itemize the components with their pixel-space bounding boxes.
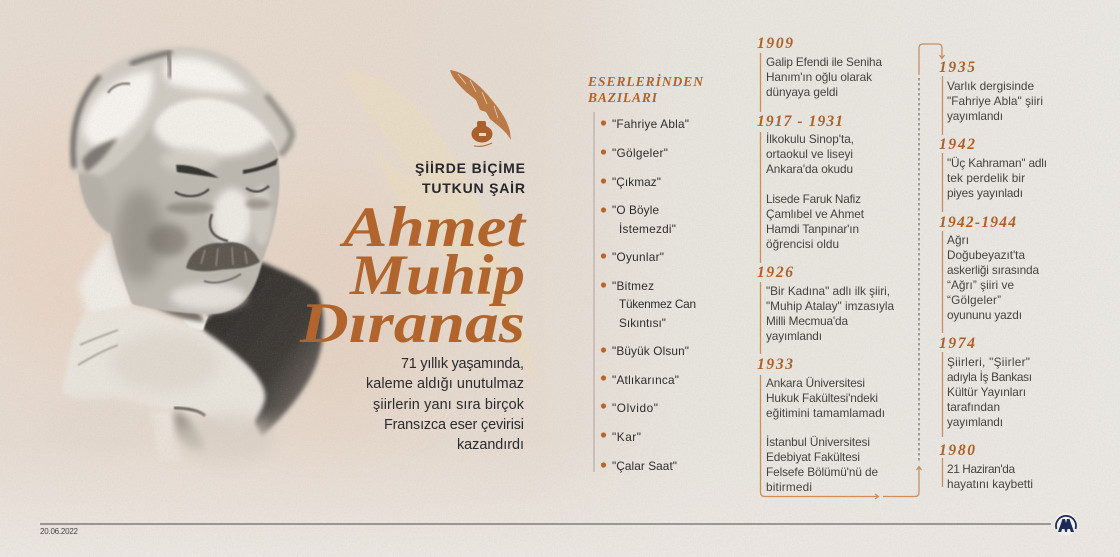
title: poet name: Ahmet <box>339 196 528 259</box>
entry: 1917-1931: Hamdi Tanpınar'ın <box>766 222 859 236</box>
text block: summary: şiirlerin yanı sıra birçok <box>373 397 525 413</box>
jacket <box>200 262 324 436</box>
works list: "Çıkmaz" <box>612 175 661 189</box>
shirt collar <box>78 234 134 316</box>
title: poet name: Muhip <box>349 244 525 307</box>
entry: 1942: tek perdelik bir <box>947 171 1025 185</box>
head and face <box>78 93 280 314</box>
panel: timeline column one <box>757 35 894 494</box>
entry: 1917-1931: Ankara'da okudu <box>766 162 853 176</box>
works list: "Oyunlar" <box>612 250 664 264</box>
entry: 1935 <box>939 59 1043 135</box>
entry: 1926: "Muhip Atalay" imzasıyla <box>766 299 894 313</box>
entry: 1942: "Üç Kahraman" adlı <box>947 156 1047 170</box>
icon: quill and inkpot <box>450 70 511 146</box>
text block: summary: Fransızca eser çevirisi <box>384 417 524 433</box>
icon: agency logo <box>1054 512 1078 536</box>
date: 20.06.2022 <box>40 527 79 536</box>
entry: 1933: Ankara Üniversitesi <box>766 376 865 390</box>
heading: selected works: ESERLERİNDEN <box>587 74 704 89</box>
entry: 1909: Galip Efendi ile Seniha <box>766 55 882 69</box>
entry: 1974: Kültür Yayınları <box>947 385 1026 399</box>
portrait photograph <box>50 47 324 466</box>
panel: timeline column two <box>939 59 1047 491</box>
entry: 1935: yayımlandı <box>947 109 1003 123</box>
entry: 1974: 1974 <box>939 335 975 352</box>
entry: 1942-1944 <box>939 214 1039 333</box>
entry: 1974: adıyla İş Bankası <box>947 370 1032 384</box>
entry: 1917-1931: Lisede Faruk Nafiz <box>766 192 861 206</box>
footer <box>40 512 1078 536</box>
hand <box>62 308 265 437</box>
entry: 1974 <box>939 335 1032 437</box>
title: poet name <box>299 196 528 355</box>
entry: 1933: Felsefe Bölümü'nü de <box>766 465 878 479</box>
entry: 1933 <box>757 356 885 494</box>
entry: 1933: 1933 <box>757 356 793 373</box>
eyes and brows <box>176 165 219 178</box>
works list: "Fahriye Abla" <box>612 117 689 131</box>
neck shadow <box>156 309 206 325</box>
entry: 1933: Hukuk Fakültesi'ndeki <box>766 391 878 405</box>
entry: 1909 <box>757 35 882 112</box>
entry: 1974: tarafından <box>947 400 1000 414</box>
entry: 1933: İstanbul Üniversitesi <box>766 435 870 449</box>
works list: Tükenmez Can <box>619 297 696 311</box>
entry: 1926: 1926 <box>757 264 793 281</box>
entry: 1935: 1935 <box>939 59 975 76</box>
entry: 1917-1931: İlkokulu Sinop'ta, <box>766 132 854 146</box>
entry: 1942-1944: oyununu yazdı <box>947 308 1022 322</box>
ear <box>80 184 110 234</box>
text block: summary <box>366 356 525 453</box>
entry: 1942-1944: “Ağrı” şiiri ve <box>947 278 1014 292</box>
works list: "Kar" <box>612 430 641 444</box>
entry: 1909: 1909 <box>757 35 793 52</box>
heading: subtitle <box>415 160 525 196</box>
entry: 1917-1931: ortaokul ve liseyi <box>766 147 853 161</box>
works list: "Atlıkarınca" <box>612 373 679 387</box>
panel: selected works <box>587 74 704 473</box>
works list: "O Böyle <box>612 203 659 217</box>
works list: İstemezdi" <box>619 222 676 236</box>
entry: 1942-1944: 1942-1944 <box>939 214 1016 231</box>
entry: 1974: Şiirleri, "Şiirler" <box>947 355 1030 369</box>
entry: 1909: Hanım'ın oğlu olarak <box>766 70 872 84</box>
works list: "Gölgeler" <box>612 146 668 160</box>
text block: summary: 71 yıllık yaşamında, <box>401 356 524 372</box>
heading: subtitle: ŞİİRDE BİÇİME <box>415 160 525 176</box>
moustache <box>186 242 260 271</box>
title: poet name: Dıranas <box>299 292 525 355</box>
entry: 1942: piyes yayınladı <box>947 186 1023 200</box>
faded background feather <box>342 68 538 392</box>
text block: summary: kazandırdı <box>457 437 524 453</box>
heading: subtitle: TUTKUN ŞAİR <box>422 180 525 196</box>
entry: 1935: "Fahriye Abla" şiiri <box>947 94 1043 108</box>
entry: 1926: "Bir Kadına" adlı ilk şiiri, <box>766 284 890 298</box>
entry: 1980: 1980 <box>939 442 975 459</box>
entry: 1974: yayımlandı <box>947 415 1003 429</box>
heading: selected works <box>587 74 704 105</box>
works list: "Olvido" <box>612 401 658 415</box>
entry: 1917-1931: 1917 - 1931 <box>757 113 843 130</box>
works list: Sıkıntısı" <box>619 316 666 330</box>
entry: 1942 <box>939 136 1047 212</box>
works list: "Büyük Olsun" <box>612 344 689 358</box>
entry: 1935: Varlık dergisinde <box>947 79 1034 93</box>
bullets <box>601 120 606 468</box>
entry: 1926: Milli Mecmua'da <box>766 314 848 328</box>
entry: 1980: hayatını kaybetti <box>947 477 1033 491</box>
entry: 1917-1931: Çamlıbel ve Ahmet <box>766 207 865 221</box>
entry: 1926 <box>757 264 894 354</box>
entry: 1933: eğitimini tamamlamadı <box>766 406 885 420</box>
entry: 1942-1944: “Gölgeler” <box>947 293 1001 307</box>
heading: selected works: BAZILARI <box>587 90 658 105</box>
works list: "Çalar Saat" <box>612 459 677 473</box>
entry: 1933: bitirmedi <box>766 480 812 494</box>
entry: 1942-1944: askerliği sırasında <box>947 263 1039 277</box>
entry: 1942-1944: Doğubeyazıt'ta <box>947 248 1025 262</box>
entry: 1917-1931 <box>757 113 865 263</box>
entry: 1980 <box>939 442 1033 491</box>
hair <box>71 47 296 176</box>
works list: "Bitmez <box>612 279 654 293</box>
sleeve below hand <box>153 412 176 458</box>
entry: 1926: yayımlandı <box>766 329 822 343</box>
arrow: timeline connector <box>760 44 944 499</box>
works list <box>612 117 696 473</box>
entry: 1909: dünyaya geldi <box>766 85 838 99</box>
entry: 1942-1944: Ağrı <box>947 233 969 247</box>
entry: 1942: 1942 <box>939 136 975 153</box>
entry: 1917-1931: öğrencisi oldu <box>766 237 839 251</box>
entry: 1980: 21 Haziran'da <box>947 462 1015 476</box>
entry: 1933: Edebiyat Fakültesi <box>766 450 860 464</box>
text block: summary: kaleme aldığı unutulmaz <box>366 376 524 392</box>
